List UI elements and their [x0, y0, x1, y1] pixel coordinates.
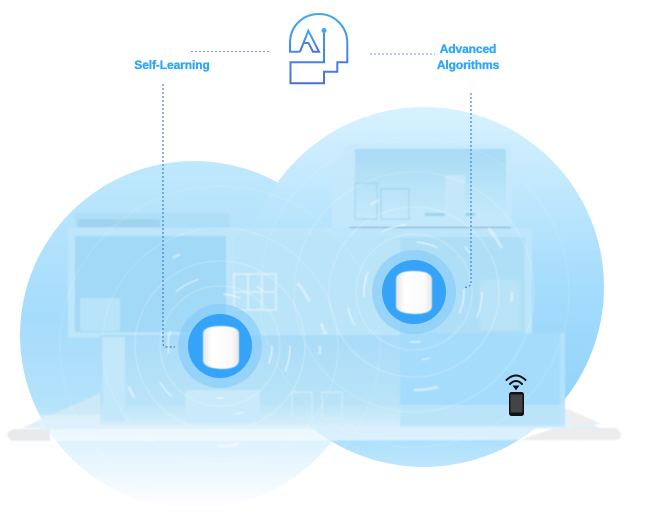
left room [75, 236, 226, 332]
shelves [234, 274, 276, 310]
router left [178, 304, 262, 388]
icon: wifi [506, 376, 526, 390]
connector: self-learning [163, 84, 175, 347]
label: Self-Learning: Self-Learning [134, 58, 210, 72]
signal rings left [60, 186, 380, 506]
icon: AI head [290, 14, 347, 83]
middle room [234, 236, 402, 332]
icon: phone [509, 392, 524, 416]
router right [372, 250, 456, 334]
second floor band [68, 228, 532, 338]
label: Advanced Algorithms: Algorithms [437, 58, 500, 72]
connector: icon to self-learning [191, 50, 269, 52]
house [68, 144, 565, 427]
right blue circle [244, 107, 604, 467]
top room [332, 144, 512, 228]
lower floor [100, 335, 400, 425]
signal rings right [259, 137, 569, 447]
label: Advanced Algorithms [437, 42, 500, 72]
roof strip left [75, 213, 230, 233]
lower right block [400, 333, 565, 425]
left blue circle [20, 161, 368, 509]
label: Advanced Algorithms: Advanced [440, 42, 496, 56]
floor platform [7, 393, 621, 441]
connector: icon to advanced [370, 53, 435, 55]
connector: advanced algorithms [463, 93, 471, 288]
right room [400, 237, 525, 333]
